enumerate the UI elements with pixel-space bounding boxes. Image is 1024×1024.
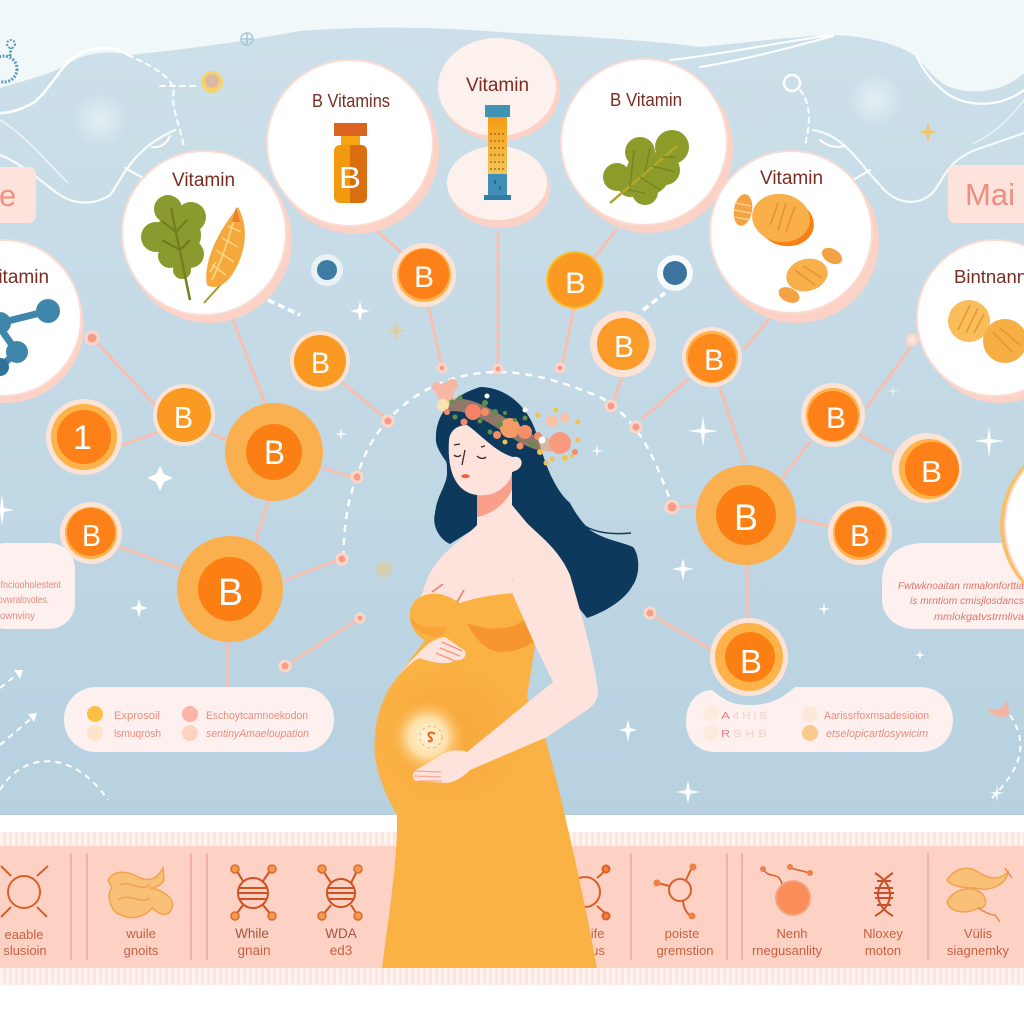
B node near crown right: B [704,344,724,377]
band: bottom stripes [0,968,1024,985]
icon: supplement bottle: B [339,160,361,195]
baby mark [420,726,442,748]
band: top stripes [0,832,1024,846]
caption: molecule one [235,926,271,958]
lips [461,474,470,478]
icon: blue molecule [0,299,60,376]
B node 1 left: 1 [73,419,92,457]
B node left lower: B [82,518,101,553]
icon: sun ring [1,866,48,917]
caption: wavy pasta [947,926,1010,958]
caption: molecule one: gnain [237,943,271,958]
caption: ring with arms: us [591,943,605,958]
B node large upper left [225,403,323,501]
label: vitamin: Vitamin [466,75,529,96]
illustration: pregnant woman [365,387,638,968]
icon: pink bird [986,700,1009,717]
text box: left note: ownviny [0,610,36,622]
B node upper right centre: B [614,329,634,364]
B node top right centre [546,251,604,309]
panel: left vitamin circle [122,151,292,323]
icon: green leaf [141,195,206,300]
caption: sun ring: slusioin [3,943,47,958]
panel: lower centre bubble [447,146,550,228]
face [449,425,522,495]
caption: ring with arms: uife [584,926,604,941]
icon: pasta [108,868,173,918]
icon: olive leaf [603,130,689,205]
caption: pasta: gnoits [124,943,159,958]
caption: molecule two [325,926,357,958]
upper hand [390,637,466,687]
legend: right: A [721,710,730,722]
icon: filled orange cell [760,864,813,915]
legend: right [686,687,953,752]
icon: molecule two [318,865,362,920]
text box: left note: Ifnciooholestent [0,579,61,591]
caption: DNA helix [863,926,903,958]
B node large lower left: B [218,572,243,614]
legend: right: S H B [733,728,767,740]
legend: right: 4 H I B [733,710,767,722]
icon: ring with arms [570,866,610,920]
belly shading [365,655,535,815]
neck shadow [477,473,512,517]
B node near crown right [682,327,742,387]
pale sky band [0,0,1024,120]
torso skin [410,470,570,645]
hair back [434,387,638,618]
B node upper right centre [590,311,656,377]
caption: molecule two: ed3 [330,943,352,958]
label: right vitamin: Vitamin [760,168,823,189]
text box: right note [882,543,1024,629]
icon: blue dot left [311,254,343,286]
cleavage lines [432,580,518,602]
icon: swirl top right [784,75,800,91]
B node top left centre: B [414,261,434,294]
dashed arc around head [343,372,670,558]
icon: molecule one [231,865,276,920]
closed eyes, brows and nose [454,444,486,465]
caption: branched ring: poiste [665,926,699,941]
icon: beaded chain ornament top left [0,40,17,82]
panel: clipped right circle [1000,438,1024,612]
sparkles [0,301,1005,804]
legend: left [64,687,334,752]
icon: test tube [484,105,511,200]
B node large lower left [177,536,283,642]
caption: sun ring: eaable [4,927,44,942]
text box: right note: is mrntiom cmisjlosdancs [910,595,1024,607]
B node near crown left [290,331,350,391]
B node right lower: B [850,518,870,553]
soft light bursts [72,72,903,148]
legend: right: etselopicartlosywicim [826,728,928,740]
B node lower right: B [740,643,762,680]
B node far right: B [921,454,942,489]
caption: filled orange cell: rnegusanlity [752,943,823,958]
label: left vitamin: Vitamin [172,170,235,191]
caption: filled orange cell [752,926,823,958]
legend: left: Exprosoil [114,710,160,722]
panel: clipped title tag left [0,167,36,223]
icon: wavy pasta [947,868,1012,922]
legend: left: Eschoytcamnoekodon [206,710,308,722]
caption: sun ring [3,927,47,958]
B node top left centre [392,243,456,307]
white strip above band [0,815,1024,832]
panel: far left vitamin circle [0,240,84,403]
decorative white curves [0,35,1024,202]
icon: wheat [204,207,245,303]
B node left upper: B [174,400,193,435]
icon: DNA helix [874,873,894,916]
dress cup shading left [410,617,447,637]
belly glow [390,699,466,775]
B node right lower [828,501,892,565]
label: B vitamin: B Vitamin [610,90,682,110]
connector lines [98,230,910,688]
icon: branched ring [654,864,696,920]
panel: top centre vitamin bubble [438,38,560,141]
icon: round biscuits [948,300,1024,363]
hair strand [577,520,631,534]
B node far right [892,433,962,503]
text box: right note: mmlokgatvstrmliva [934,611,1024,623]
caption: wavy pasta: siagnemky [947,943,1010,958]
caption: DNA helix: moton [865,943,901,958]
connector end dots [86,332,917,671]
lower hand fingers [414,771,442,781]
caption: pasta [124,926,159,958]
arrow heads lower left [14,670,37,722]
right arm and lower hand [413,505,598,783]
B node large right [696,465,796,565]
legend: left: sentinyAmaeloupation [206,728,309,740]
label: B vitamins: B Vitamins [312,91,390,111]
B node large upper left: B [264,434,285,472]
caption: branched ring [656,926,714,958]
text box: left note [0,543,75,629]
B node left lower [60,502,122,564]
upper hand fingers [436,642,462,661]
icon: small yellow flower [201,71,223,93]
icon: orange nuts [731,189,845,306]
caption: pasta: wuile [125,926,156,941]
B node lower right [710,618,788,696]
panel: B vitamin leaf circle [561,59,733,233]
panel: B vitamins bottle circle [267,60,439,234]
panel: right vitamin circle [710,151,879,323]
yellow sparkles [376,122,938,577]
dashed arrows lower left [0,672,1020,800]
B node left upper [153,384,215,446]
white dashed links to blue dots [268,293,665,315]
B node top right centre: B [565,267,586,300]
dress [374,593,597,968]
B node large right: B [734,497,758,538]
icon: supplement bottle [334,123,367,203]
label: clipped right title: Mai [965,177,1015,212]
legend: left: lsmuqrosh [114,728,161,740]
caption: wavy pasta: Vülis [964,926,993,941]
flower crown [432,379,580,466]
caption: molecule one: While [235,926,269,941]
legend: right: Aarissrfoxmsadesioion [824,710,929,722]
caption: DNA helix: Nloxey [863,926,903,941]
icon: small cross circle [241,33,253,45]
dress cup shading [467,617,535,652]
icon: blue dot right [657,255,693,291]
B node near crown left: B [311,347,330,380]
B node right upper: B [826,402,846,435]
panel: bottom benefit band [0,846,1024,968]
caption: filled orange cell: Nenh [776,926,808,941]
caption: branched ring: gremstion [656,943,714,958]
panel: clipped title tag right [948,165,1024,223]
B node right upper [801,383,865,447]
panel: far right biotin circle [917,240,1024,403]
caption: ring with arms [584,926,605,958]
blue wave background [0,28,1024,815]
caption: molecule two: WDA [325,926,357,941]
B node 1 left [46,399,122,475]
legend: right: R [721,728,730,740]
